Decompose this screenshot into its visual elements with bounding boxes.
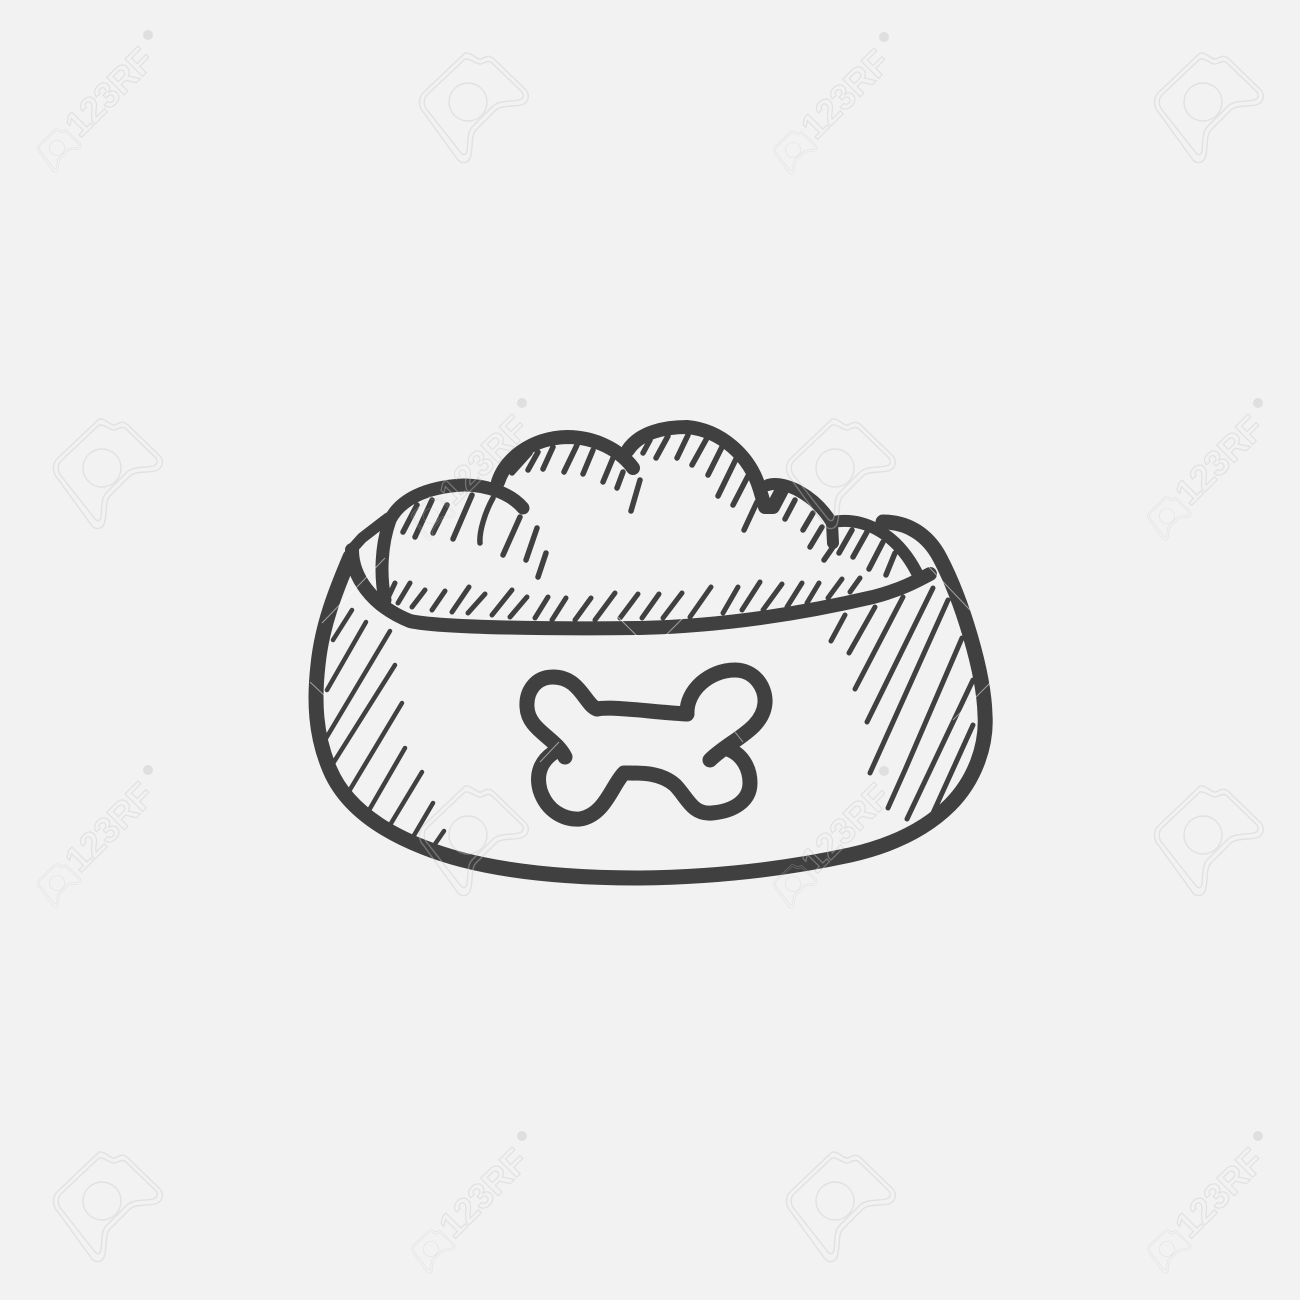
faint artifact lines xyxy=(310,558,990,762)
icon: bone xyxy=(527,670,765,819)
bowl rim xyxy=(352,550,930,628)
hatching: rim band xyxy=(387,578,860,620)
hatching: food xyxy=(403,435,895,577)
icon: dog food bowl with bone xyxy=(316,427,985,878)
hatching: bowl right xyxy=(831,588,973,819)
bowl outline xyxy=(316,522,985,878)
food mound xyxy=(382,427,917,600)
hatching: bowl left xyxy=(325,610,444,847)
